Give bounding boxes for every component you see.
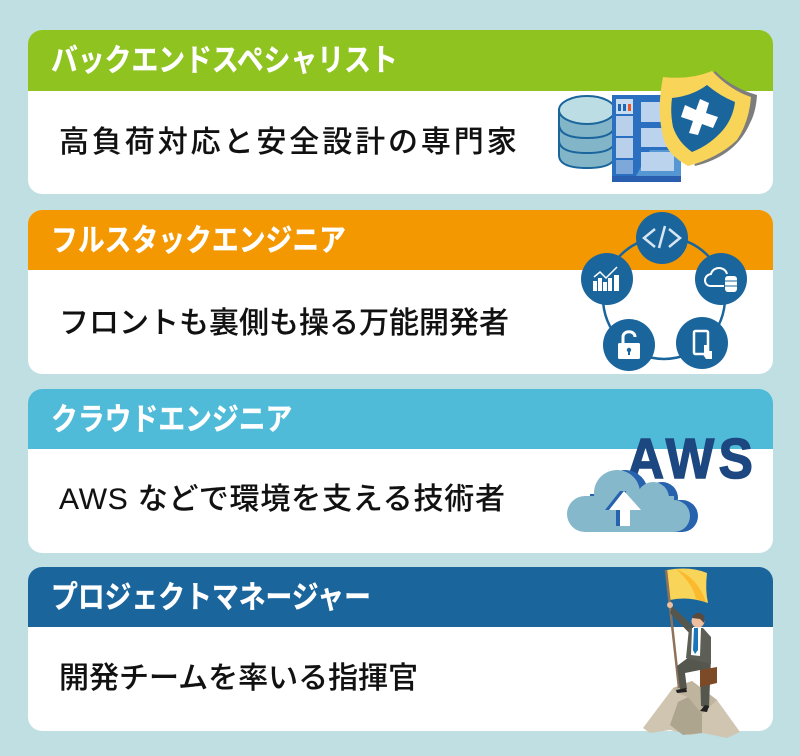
text: AWS logo: AWS [627, 428, 757, 491]
icon: database, server and shield [559, 71, 757, 182]
header band: project manager [28, 567, 773, 627]
briefcase [700, 667, 717, 687]
shirt [691, 628, 701, 656]
raised arm [670, 606, 693, 637]
icon: cloud [567, 470, 690, 532]
tie [693, 628, 698, 654]
heading: project manager: プロジェクトマネージャー [51, 580, 371, 615]
flag [667, 569, 708, 603]
jacket [686, 628, 711, 664]
icon: database [559, 96, 615, 168]
shoes [676, 688, 687, 693]
text: project manager description: 開発チームを率いる指揮官 [59, 662, 418, 695]
header band: full-stack engineer [28, 210, 773, 270]
text: full-stack engineer description: フロントも裏側も操る万能開発者 [59, 307, 509, 340]
text: backend specialist description: 高負荷対応と安全設計の専門家 [59, 126, 520, 159]
icon: tablet circle [676, 317, 728, 369]
icon: cloud database circle [695, 253, 747, 305]
legs [677, 654, 711, 708]
heading: cloud engineer: クラウドエンジニア [51, 402, 292, 437]
icon: padlock circle [603, 319, 655, 371]
icon: AWS cloud upload [567, 428, 757, 532]
rock [643, 681, 740, 738]
icon: shield with cross [660, 71, 757, 166]
illustration: businessman with flag on rock [643, 569, 740, 738]
head [692, 614, 704, 628]
icon: bar chart circle [581, 253, 633, 305]
icon: full-stack ring of five circles [581, 212, 747, 371]
header band: backend specialist [28, 30, 773, 91]
header band: cloud engineer [28, 389, 773, 449]
text: cloud engineer description: AWS などで環境を支える技術者 [59, 483, 506, 516]
flag pole [666, 570, 679, 688]
panel: backend specialist [28, 30, 773, 194]
heading: full-stack engineer: フルスタックエンジニア [51, 223, 346, 258]
panel: full-stack engineer [28, 210, 773, 374]
icon: cloud shadow [590, 470, 698, 532]
icon: upload arrow [605, 491, 641, 526]
icon: code circle [636, 212, 688, 264]
panel: project manager [28, 567, 773, 731]
panel: cloud engineer [28, 389, 773, 553]
icon: server rack [612, 95, 681, 182]
heading: backend specialist: バックエンドスペシャリスト [51, 43, 398, 78]
